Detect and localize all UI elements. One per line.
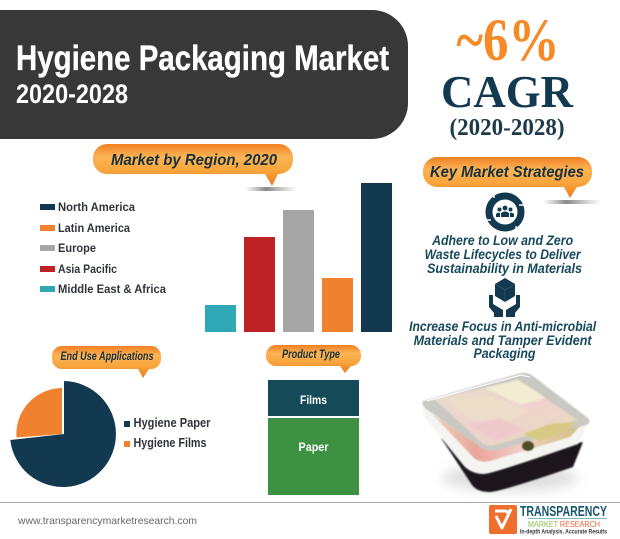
image: food container bbox=[422, 373, 590, 492]
heading: key market strategies: Key Market Strategies bbox=[430, 164, 584, 181]
chart: product type bbox=[268, 380, 359, 495]
legend: end use: Hygiene Paper bbox=[134, 416, 211, 430]
subtitle years: 2020-2028 bbox=[16, 79, 128, 109]
heading: market by region bbox=[93, 144, 297, 191]
legend: end use bbox=[124, 416, 211, 450]
container rim bbox=[423, 408, 590, 474]
legend: end use: Hygiene Films bbox=[134, 436, 207, 450]
text: strategy two: Increase Focus in Anti-microbial bbox=[409, 319, 596, 334]
legend: region: Europe bbox=[58, 241, 96, 255]
header banner bbox=[0, 10, 408, 139]
block: paper: Paper bbox=[298, 440, 329, 454]
legend: region: Middle East & Africa bbox=[58, 282, 166, 296]
logo icon bbox=[489, 505, 517, 534]
food under lid bbox=[434, 380, 578, 446]
visible food, front bbox=[432, 414, 582, 462]
legend: region: Latin America bbox=[58, 221, 130, 235]
growth figure: ~6% bbox=[456, 7, 560, 73]
heading: end use applications bbox=[52, 346, 161, 378]
text: strategy one: Adhere to Low and Zero bbox=[431, 233, 573, 248]
legend: region: Asia Pacific bbox=[58, 262, 117, 276]
bar chart: region bbox=[205, 183, 392, 332]
heading: product type bbox=[266, 345, 361, 373]
text: strategy one: Sustainability in Materials bbox=[427, 261, 582, 276]
logo market research: MARKET RESEARCH bbox=[528, 519, 600, 529]
text: strategy two: Packaging bbox=[474, 346, 536, 361]
lid bbox=[422, 373, 590, 451]
container base bbox=[441, 438, 583, 492]
website url: www.transparencymarketresearch.com bbox=[17, 515, 197, 527]
legend: region bbox=[40, 200, 166, 296]
divider bbox=[0, 502, 620, 503]
text: strategy two: Materials and Tamper Evident bbox=[414, 333, 592, 348]
CAGR period: (2020-2028) bbox=[450, 115, 564, 141]
pie chart: end use bbox=[10, 381, 116, 487]
heading: key market strategies bbox=[423, 157, 601, 204]
heading: end use applications: End Use Applications bbox=[60, 351, 154, 363]
title: Hygiene Packaging Market bbox=[16, 39, 389, 78]
legend: region: North America bbox=[58, 200, 135, 214]
icon: lifecycle arrows with people bbox=[484, 192, 526, 232]
heading: product type: Product Type bbox=[282, 349, 340, 361]
logo: transparency market research bbox=[489, 503, 607, 536]
heading: market by region: Market by Region, 2020 bbox=[111, 152, 277, 169]
icon: hands holding box bbox=[489, 278, 520, 317]
block: films: Films bbox=[300, 393, 327, 407]
text: strategy one: Waste Lifecycles to Deliver bbox=[425, 247, 581, 262]
CAGR label: CAGR bbox=[441, 67, 573, 117]
CAGR callout bbox=[441, 7, 573, 141]
